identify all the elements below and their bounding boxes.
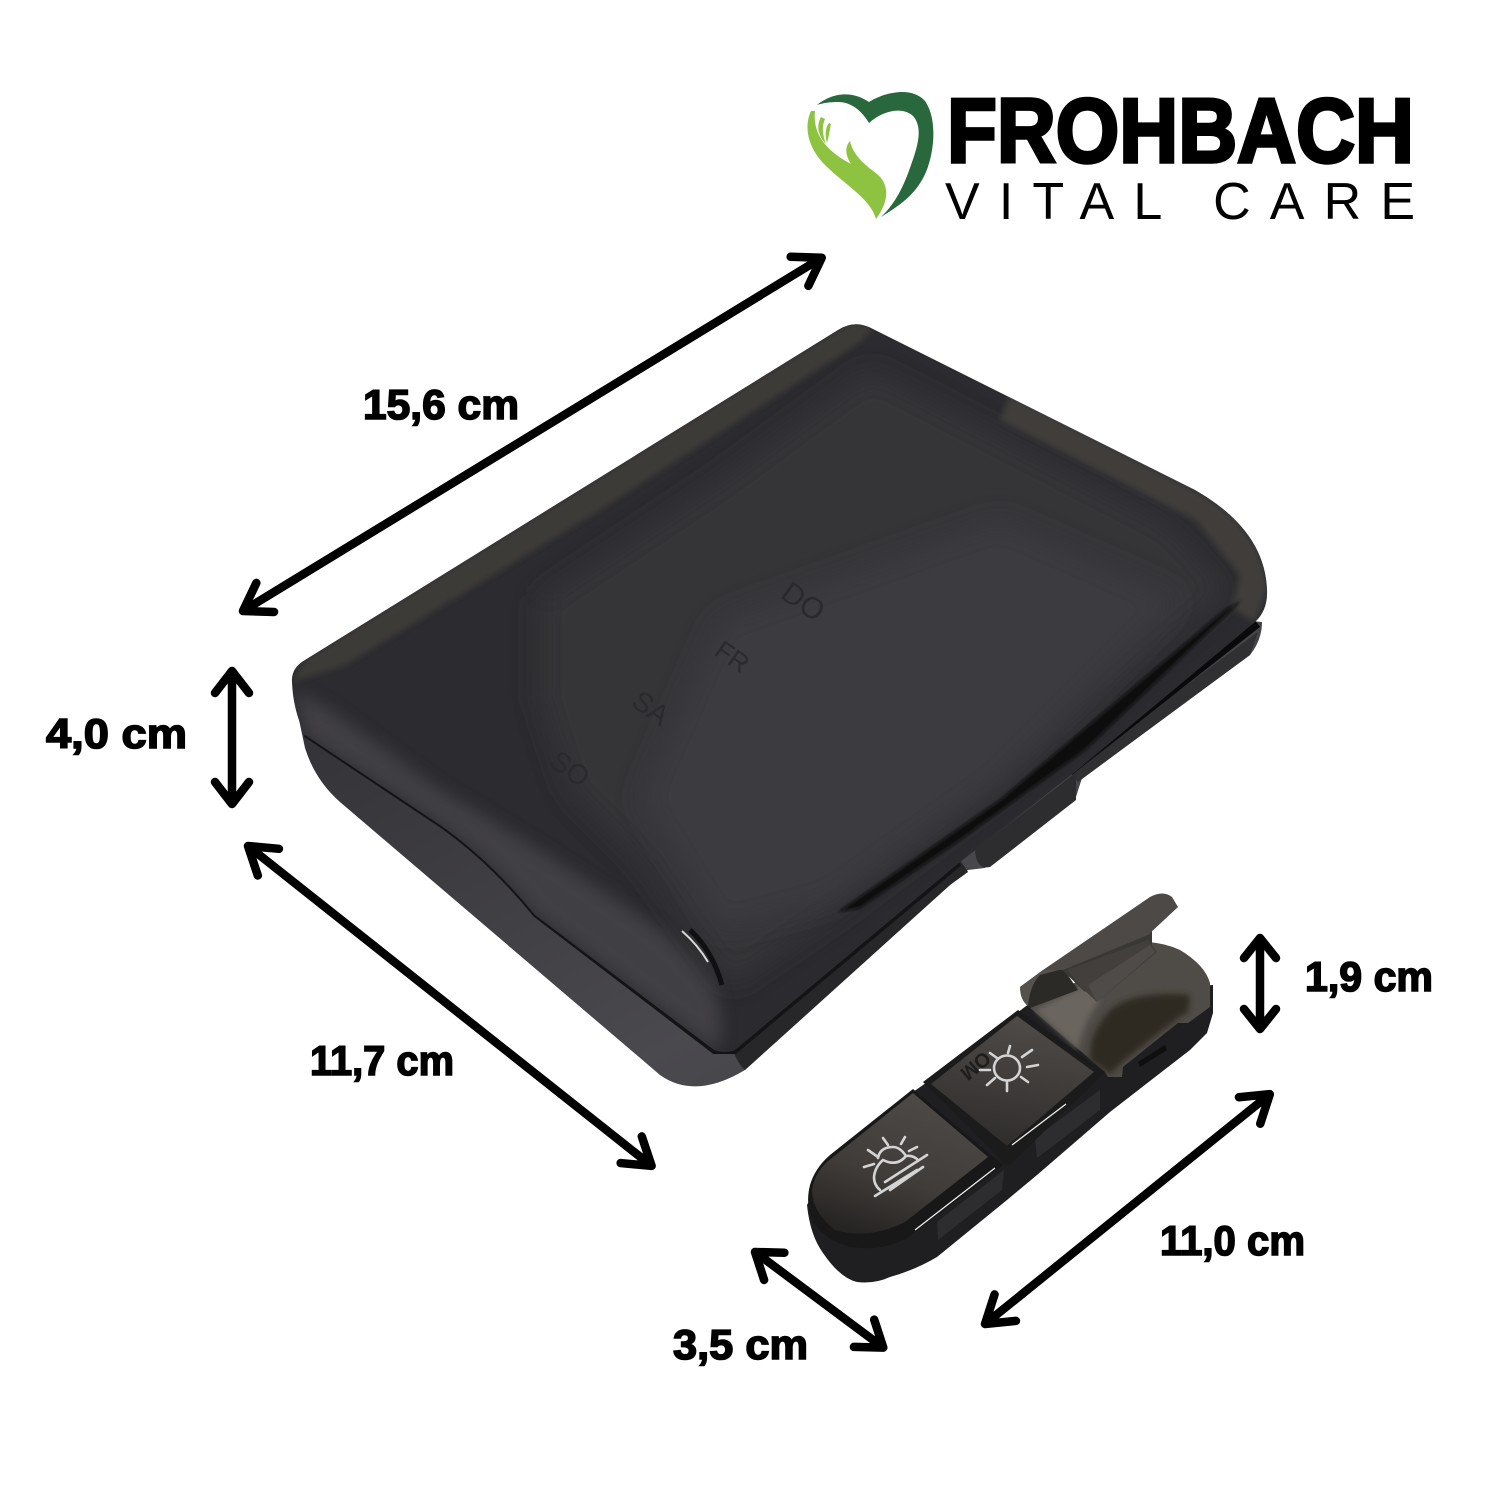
open compartment	[1030, 942, 1210, 1077]
label: 3,5 cm: 3,5 cm	[673, 1321, 808, 1368]
case base	[298, 620, 1262, 1086]
flap tab	[1067, 940, 1157, 1002]
brand name: FROHBACH	[947, 81, 1414, 182]
small pill box	[807, 894, 1213, 1282]
arrow: width 3,5 cm	[745, 1238, 893, 1361]
case lid	[292, 324, 1267, 1052]
case seam	[305, 735, 960, 1052]
icon: sunrise	[864, 1137, 927, 1196]
arrow: length 15,6 cm	[234, 243, 831, 626]
left lid	[808, 1089, 1003, 1248]
day labels on lid	[545, 576, 831, 793]
arrow: height 1,9 cm	[1244, 938, 1276, 1029]
flap backing	[1058, 930, 1152, 992]
arrow: height 4,0 cm	[215, 671, 249, 804]
mirrored MO label: MO	[956, 1046, 995, 1084]
day labels on lid: SO	[545, 745, 595, 793]
label: 1,9 cm: 1,9 cm	[1305, 953, 1433, 1000]
icon: sun	[980, 1046, 1038, 1091]
lid shading	[292, 322, 1267, 1050]
large pill case	[292, 322, 1267, 1086]
latch	[975, 772, 1076, 867]
label: 11,0 cm: 11,0 cm	[1160, 1217, 1305, 1264]
tagline: VITAL CARE	[945, 173, 1415, 231]
label: 15,6 cm: 15,6 cm	[363, 381, 519, 428]
day labels on lid: SA	[627, 685, 675, 732]
small box base	[807, 985, 1213, 1282]
logo	[807, 81, 1415, 231]
lid glint	[682, 931, 708, 962]
day labels on lid: FR	[710, 634, 755, 679]
day labels on lid: DO	[775, 576, 831, 629]
arrow: length 11,0 cm	[974, 1081, 1281, 1337]
flap underside	[1020, 968, 1078, 1008]
label: 11,7 cm: 11,7 cm	[310, 1037, 454, 1084]
middle lid	[923, 1010, 1105, 1165]
label: 4,0 cm: 4,0 cm	[46, 710, 187, 757]
flap	[1043, 894, 1178, 970]
base right side	[733, 860, 968, 1070]
lid reflections	[915, 1104, 1066, 1230]
arrow: width 11,7 cm	[237, 833, 662, 1179]
body side panels	[937, 1090, 1100, 1240]
logo heart icon	[807, 92, 933, 219]
